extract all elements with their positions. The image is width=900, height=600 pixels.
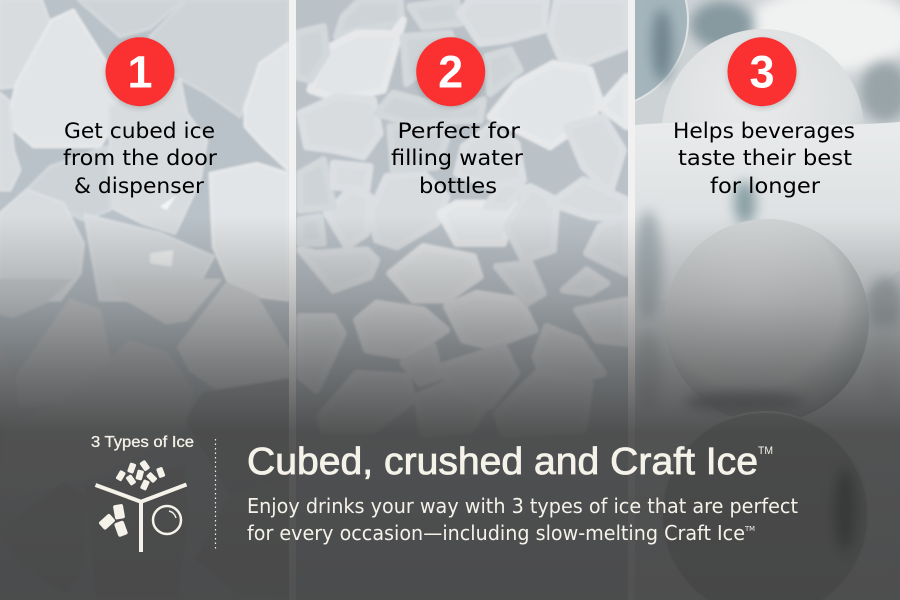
caption 2: bottles (419, 174, 497, 199)
icon: cubed ice pieces (98, 504, 128, 537)
body text: Enjoy drinks your way with 3 types of ice that are perfect (247, 494, 798, 518)
icon: three ice types (96, 460, 186, 552)
caption 1: from the door (63, 146, 217, 171)
badge label: 3 Types of Ice: 3 Types of Ice (91, 434, 194, 451)
red number badge 3 (728, 37, 796, 108)
icon: craft ice sphere (153, 506, 181, 534)
panel: craft ice photo (635, 0, 900, 600)
headline: TM (758, 445, 773, 457)
panel: cubed ice photo (0, 0, 289, 600)
step 3: craft ice (673, 37, 855, 199)
caption 2 (391, 119, 523, 199)
caption 1: Get cubed ice (64, 119, 215, 144)
caption 1 (63, 119, 217, 199)
red number badge 2 (416, 37, 485, 108)
panel: crushed ice photo (296, 0, 628, 512)
step 2: crushed ice (391, 37, 523, 199)
red number badge 2: 2 (438, 46, 463, 98)
red number badge 3: 3 (749, 46, 775, 98)
body text: for every occasion—including slow-melting Craft Ice (247, 521, 745, 545)
caption 3: for longer (710, 174, 820, 199)
red number badge 1 (106, 37, 174, 108)
icon: Y divider (96, 484, 186, 552)
caption 3: Helps beverages (673, 119, 855, 144)
caption 3 (673, 119, 855, 199)
caption 3: taste their best (678, 146, 852, 171)
red number badge 1: 1 (127, 46, 153, 98)
caption 2: Perfect for (398, 119, 520, 144)
step 1: cubed ice (63, 37, 217, 199)
icon: crushed ice pieces (115, 460, 166, 491)
dotted divider (214, 439, 216, 551)
caption 2: filling water (391, 146, 523, 171)
body text (247, 494, 798, 545)
caption 1: & dispenser (74, 174, 204, 199)
body text: TM (744, 525, 755, 533)
headline: Cubed, crushed and Craft Ice (247, 441, 758, 483)
